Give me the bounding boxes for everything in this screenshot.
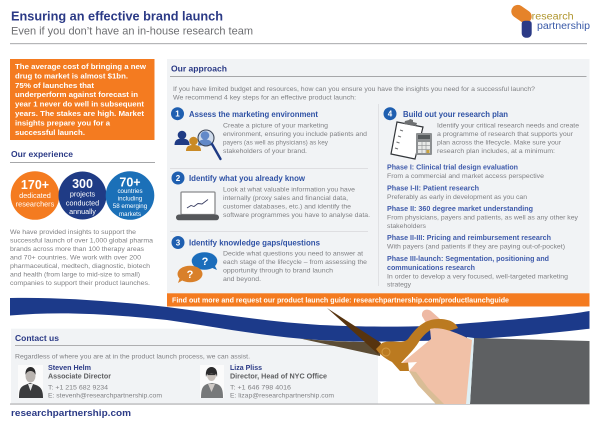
step 2: Look at what valuable information you have (223, 186, 355, 193)
experience paragraph: pharmaceutical, medtech, diagnostic, biotech (10, 263, 150, 270)
phase list: Phase I: Clinical trial design evaluation (387, 164, 518, 172)
photo: Liza Pliss (200, 365, 224, 398)
intro text: If you have limited budget and resources, how can you ensure you have the insights you need for a successful launch? (173, 86, 535, 93)
step 2: 2 (176, 174, 181, 183)
contact: Liza Pliss: Director, Head of NYC Office (230, 374, 327, 381)
stat circle: countries: 70+ (119, 175, 141, 189)
stat circle: projects: projects (70, 190, 95, 198)
header rule (10, 43, 587, 44)
step 2: software programmes you have to analyse data. (223, 212, 370, 219)
step 4: plan across the lifecycle. Make sure your (437, 139, 562, 146)
logo: research partnership: research (532, 12, 574, 22)
title: Ensuring an effective brand launch (11, 8, 223, 24)
phase list: Phase II: 360 degree market understanding (387, 206, 533, 213)
cuff (465, 337, 474, 404)
panel: key stat callout: drug to market is almost $1bn. (15, 71, 128, 80)
step 2: customer databases, etc.) and identify the (223, 203, 351, 210)
subtitle: Even if you don’t have an in-house research team (11, 26, 253, 38)
ribbon (10, 298, 590, 342)
contact: Liza Pliss: Liza Pliss (230, 365, 262, 372)
step 2: internally (proxy sales and financial data, (223, 195, 348, 202)
step 4: Identify your critical research needs and create (437, 122, 579, 129)
experience paragraph: successful launch of over 1,000 global pharma (10, 238, 153, 244)
contact: Steven Helm: Associate Director (48, 374, 111, 381)
step 3: Decide what questions you need to answer at (223, 250, 363, 257)
step 3: each stage of the lifecycle – from assessing the (223, 259, 367, 266)
step 2: Identify what you already know (189, 174, 306, 183)
contact intro: Regardless of where you are at in the product launch process, we can assist. (15, 353, 250, 360)
panel: key stat callout: 75% of launches that (15, 81, 95, 90)
experience paragraph: and health (from large to mid-size to small) (10, 272, 140, 279)
step 3 (172, 236, 367, 283)
stat circle: projects: conducted (66, 198, 99, 207)
stat circle: projects: annually (69, 207, 96, 216)
panel: key stat callout: year 1 never do well in subsequent (15, 100, 145, 109)
phase list: In order to develop a very focused, well-targeted marketing (387, 273, 568, 280)
panel: our approach (167, 59, 590, 294)
stat circle: researchers: researchers (16, 200, 55, 208)
icon: laptop with chart (176, 192, 219, 220)
phase list: Phase I-II: Patient research (387, 186, 479, 192)
step 1 (171, 107, 367, 159)
step 2 (172, 172, 370, 220)
website url: researchpartnership.com (11, 408, 131, 419)
lower blade (300, 338, 381, 356)
photo: Steven Helm (18, 365, 43, 398)
phase list: With payers (and patients if they are paying out-of-pocket) (387, 244, 565, 251)
panel: key stat callout: The average cost of bringing a new (15, 62, 146, 71)
heading: contact us: Contact us (15, 333, 59, 343)
upper blade (327, 308, 381, 354)
step 4: a programme of research that supports your (437, 131, 574, 138)
stat circle: countries: markets (119, 211, 141, 218)
stat circle: countries (106, 171, 154, 220)
panel: contact us (11, 329, 378, 404)
contact: Liza Pliss (200, 365, 334, 400)
phase list: From a commercial and market access perspective (387, 173, 544, 180)
phase list: Phase III-launch: Segmentation, positioning and (387, 256, 549, 263)
contact: Steven Helm: Steven Helm (48, 365, 91, 372)
phase list: Preferably as early in development as you can (387, 194, 527, 201)
icon: speech bubbles: ? (187, 269, 194, 281)
sleeve (470, 338, 590, 404)
bottom rule (10, 404, 590, 405)
step 1: Create a picture of your marketing (223, 122, 328, 129)
phase list (387, 164, 579, 289)
contact: Steven Helm: T: +1 215 682 9234 (48, 384, 108, 392)
step 1: 1 (175, 110, 180, 118)
panel: key stat callout (10, 59, 154, 140)
thumb (422, 310, 440, 326)
step 4: research plan includes, at a minimum: (437, 148, 555, 155)
phase list: strategy (387, 282, 412, 289)
stat circle: countries: 58 emerging (113, 203, 148, 210)
call to action banner (167, 293, 590, 306)
phase list: Phase II-III: Pricing and reimbursement research (387, 235, 551, 242)
heading: our experience: Our experience (11, 149, 73, 159)
stat circle: researchers: dedicated (19, 191, 51, 200)
logo: research partnership (509, 2, 591, 38)
phase list: communications research (387, 265, 475, 272)
intro text: We recommend 4 key steps for an effective product launch: (173, 94, 356, 101)
icon: people and magnifier (174, 130, 220, 159)
experience paragraph: and 70+ countries. We work with over 200 (10, 254, 141, 262)
contact: Steven Helm (18, 365, 162, 400)
hand (402, 328, 472, 404)
heading: our approach: Our approach (171, 64, 227, 74)
step 3: and beyond. (223, 276, 261, 283)
step 3: Identify knowledge gaps/questions (189, 238, 320, 248)
intro text (173, 86, 535, 101)
experience paragraph: companies to support their product launches. (10, 280, 150, 287)
logo: research partnership: partnership (537, 21, 591, 32)
contact: Liza Pliss: T: +1 646 798 4016 (230, 384, 291, 392)
step 4 (384, 107, 579, 159)
phase list: From physicians, payers and patients, as well as any other key (387, 214, 579, 221)
panel: key stat callout: underperform against forecast in (15, 90, 139, 99)
experience paragraph: brands across more than 100 therapy areas (10, 246, 145, 253)
step 4: Build out your research plan (403, 110, 508, 119)
experience rule (10, 162, 155, 163)
stat circle: countries: including (118, 196, 143, 202)
contact: Steven Helm: E: stevenh@researchpartnership.com (48, 393, 162, 400)
stat circle: researchers: 170+ (21, 178, 49, 192)
step 3: opportunity through to brand launch (223, 267, 333, 274)
panel: key stat callout: successful launch. (15, 128, 85, 137)
step 1: stakeholders of your brand. (223, 148, 307, 155)
panel: key stat callout: years. The stakes are high. Market (15, 109, 145, 118)
stat circle: countries: countries (117, 188, 143, 195)
icon: speech bubbles: ? (202, 256, 209, 268)
stat circle: projects (58, 172, 106, 220)
experience paragraph (10, 229, 153, 287)
step 1: Assess the marketing environment (189, 110, 318, 119)
contact: Liza Pliss: E: lizap@researchpartnership.com (230, 393, 334, 400)
icon: clipboard and calculator (391, 119, 432, 159)
step 1: environment, ensuring you include patients and (223, 131, 367, 138)
panel: key stat callout: insights prepare you for a (15, 118, 111, 127)
stat circle: projects: 300 (72, 177, 93, 191)
illustration: hand with scissors cutting ribbon (300, 308, 590, 404)
scissor handles (376, 319, 458, 371)
phase list: stakeholders (387, 223, 427, 230)
stat circle: researchers (11, 171, 59, 220)
step 4: 4 (388, 110, 393, 118)
step 3: 3 (176, 238, 181, 247)
step 1: payers (as well as physicians) as key (223, 139, 329, 146)
icon: speech bubbles (178, 252, 217, 283)
call to action banner: Find out more and request our product launch guide: researchpartnership.com/productlaunchguide (172, 296, 509, 304)
experience paragraph: We have provided insights to support the (10, 229, 136, 236)
